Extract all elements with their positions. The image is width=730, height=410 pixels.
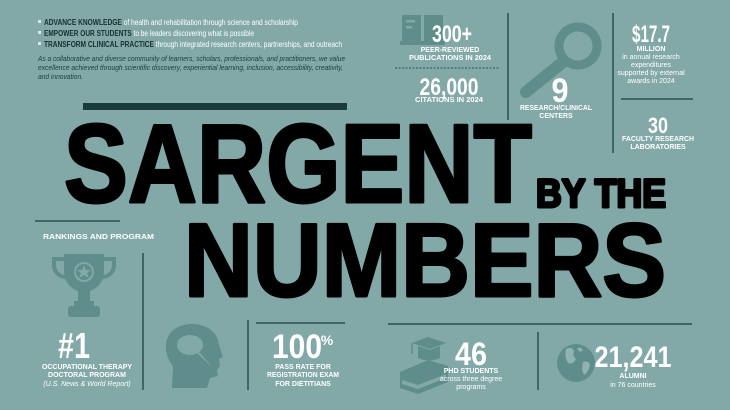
title: Sargent by the numbers	[64, 102, 666, 319]
icon: globe	[557, 344, 595, 382]
values paragraph: excellence achieved through scientific discovery, experiential learning, inclusion, accessibility, creativity,	[38, 63, 343, 72]
stat: $17.7 million: in annual research	[622, 54, 680, 61]
stat: #1 occupational therapy: #1	[58, 325, 90, 366]
stat: 21,241 alumni	[594, 341, 672, 389]
values paragraph	[37, 54, 345, 81]
stat: 30 laboratories: 30	[648, 113, 668, 138]
mission bullets: ADVANCE KNOWLEDGE of health and rehabilitation through science and scholarship	[44, 18, 298, 27]
stat: 46 PhD students: across three degree	[440, 376, 502, 383]
icon: head with speech bubble	[166, 324, 223, 388]
stat: $17.7 million: supported by external	[617, 70, 685, 77]
stat: 26,000 citations: 26,000	[420, 74, 478, 101]
stat: #1 occupational therapy: OCCUPATIONAL THERAPY	[42, 364, 132, 371]
stat: 46 PhD students: 46	[455, 336, 487, 372]
values paragraph: As a collaborative and diverse community of learners, scholars, professionals, and practitioners, we value	[37, 54, 345, 63]
stat: 100% pass rate: FOR DIETITIANS	[275, 381, 331, 388]
heading: rankings and program: RANKINGS AND PROGRAM	[43, 232, 154, 241]
mission bullets	[38, 18, 342, 49]
stat: 100% pass rate: %	[321, 332, 334, 348]
stat: $17.7 million: awards in 2024	[627, 78, 675, 85]
dark bar	[83, 103, 347, 110]
icon: graduation cap and book	[400, 337, 448, 394]
icon: book	[400, 15, 445, 45]
icon: magnifier	[526, 27, 597, 92]
stat: 300+ publications: 300+	[432, 21, 472, 48]
stat: $17.7 million: expenditures	[631, 62, 672, 69]
stat: $17.7 million: MILLION	[637, 46, 665, 53]
title: Sargent by the numbers: SARGENT	[64, 102, 532, 226]
stat: 46 PhD students	[440, 336, 502, 391]
stat: #1 occupational therapy	[42, 325, 132, 388]
stat: 9 centers: CENTERS	[539, 113, 573, 120]
stat: 100% pass rate: PASS RATE FOR	[275, 364, 331, 371]
values paragraph: and innovation.	[38, 72, 83, 81]
stat: $17.7 million	[617, 21, 685, 85]
stat: 21,241 alumni: 21,241	[594, 341, 672, 374]
stat: 21,241 alumni: in 76 countries	[610, 382, 656, 389]
stat: 30 laboratories: FACULTY RESEARCH	[622, 136, 694, 143]
icon: trophy	[54, 254, 114, 317]
stat: $17.7 million: $17.7	[632, 21, 670, 48]
stat: 9 centers	[520, 72, 593, 120]
title: Sargent by the numbers: NUMBERS	[184, 203, 666, 319]
stat: 26,000 citations: CITATIONS IN 2024	[415, 97, 483, 104]
stat: 9 centers: RESEARCH/CLINICAL	[520, 105, 593, 112]
stat: 300+ publications: PEER-REVIEWED	[421, 47, 479, 54]
stat: #1 occupational therapy: (U.S. News & World Report)	[43, 381, 131, 388]
stat: 30 laboratories	[622, 113, 694, 151]
stat: #1 occupational therapy: DOCTORAL PROGRAM	[48, 372, 126, 379]
mission bullets: TRANSFORM CLINICAL PRACTICE through integrated research centers, partnerships, and outreach	[44, 40, 342, 49]
mission bullets: EMPOWER OUR STUDENTS to be leaders discovering what is possible	[44, 29, 254, 38]
stat: 300+ publications	[409, 21, 491, 62]
stat: 9 centers: 9	[552, 72, 568, 110]
stat: 100% pass rate: 100	[272, 328, 322, 366]
stat: 100% pass rate: REGISTRATION EXAM	[267, 372, 339, 379]
title: Sargent by the numbers: BY THE	[536, 172, 666, 216]
stat: 300+ publications: PUBLICATIONS IN 2024	[409, 55, 491, 62]
stat: 100% pass rate	[267, 328, 339, 388]
stat: 21,241 alumni: ALUMNI	[619, 373, 647, 380]
stat: 46 PhD students: PHD STUDENTS	[444, 368, 499, 375]
stat: 46 PhD students: programs	[456, 384, 486, 391]
stat: 30 laboratories: LABORATORIES	[630, 144, 686, 151]
